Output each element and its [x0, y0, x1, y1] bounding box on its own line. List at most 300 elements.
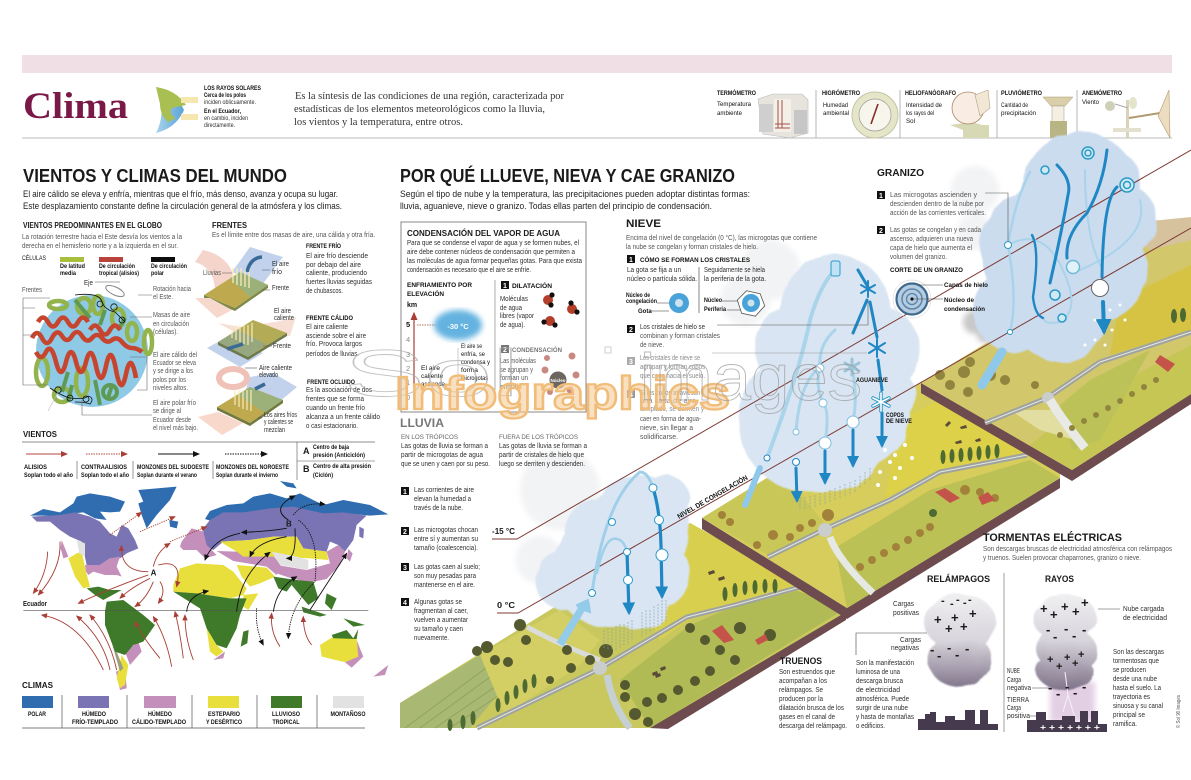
humid warm temperate [61, 528, 388, 690]
thunder text: dilatación brusca de los [779, 705, 844, 712]
snow step 4: templado, se derriten y [640, 406, 704, 413]
rain in tropics: EN LOS TRÓPICOS [401, 432, 459, 441]
charges: + [1072, 658, 1078, 670]
step 3: 3 [403, 565, 407, 572]
sun rays text [204, 86, 261, 129]
instrument: heliofanógrafo [905, 89, 990, 138]
winds legend: A [303, 446, 310, 456]
intro text: los vientos y la temperatura, entre otros. [294, 117, 463, 128]
hail step 2: capa de hielo que aumenta el [890, 245, 972, 252]
rain heading: LLUVIA [400, 416, 444, 430]
sun rays text: inciden oblicuamente. [204, 100, 256, 106]
step 4: Algunas gotas se [414, 599, 462, 606]
icon: sun rays on earth [156, 87, 198, 133]
warm front text: FRENTE CÁLIDO [306, 313, 353, 322]
lightning bolts column: Nube cargada [1123, 606, 1164, 613]
cold front labels [203, 261, 289, 292]
rain outside tropics: FUERA DE LOS TRÓPICOS [499, 432, 579, 441]
red trade winds [33, 512, 312, 670]
occluded front text: FRENTE OCLUIDO [307, 379, 355, 386]
rain in tropics [401, 432, 490, 468]
instrument: higrómetro: Humedad [823, 103, 848, 109]
lightning bolts column: de electricidad [1123, 615, 1167, 622]
watermark: Sol [344, 336, 519, 410]
warm front text: asciende sobre el aire [306, 333, 366, 340]
hail step 2: 2 [879, 228, 883, 235]
climate legend: ESTEPARIO [208, 712, 240, 718]
sun rays text: LOS RAYOS SOLARES [204, 86, 261, 92]
globe panel heading and text: derecha en el hemisferio norte y a la izquierda en el sur. [22, 243, 178, 250]
snow heading and intro: la nube se congelan y forman cristales de hielo. [626, 244, 758, 251]
charges [1040, 595, 1089, 701]
lightning bolts column: + + + + + + + [1040, 723, 1100, 732]
cell legend: polar [151, 271, 165, 277]
elevation cooling chart: asciende [421, 382, 446, 388]
storm cloud [924, 594, 996, 687]
globe labels: Masas de aire [153, 312, 190, 319]
snow step 2: 2 [629, 327, 633, 334]
cell legend: De circulación [99, 264, 135, 270]
occluded front text: o casi estacionario. [306, 423, 358, 430]
elevation cooling chart: 1 [406, 378, 410, 387]
rain in tropics: Las gotas de lluvia se forman a [401, 443, 488, 450]
central section intro: Según el tipo de nube y la temperatura, las precipitaciones pueden adoptar distintas formas: [400, 189, 750, 199]
instrument: heliofanógrafo: Sol [906, 119, 915, 125]
terrain plate 2 [702, 383, 1060, 619]
cold front text: de chubascos. [306, 288, 343, 295]
charges: - [1073, 685, 1077, 700]
charges: - [937, 648, 941, 663]
elevation cooling chart: 2 [406, 364, 410, 373]
warm front text: El aire caliente [306, 324, 348, 331]
equator label: Ecuador [23, 601, 47, 608]
icon: condensation nucleus: Núcleo [550, 378, 566, 383]
lightning bolts column: Carga [1007, 705, 1021, 712]
charges: + [1081, 595, 1089, 610]
small marker square [605, 347, 611, 353]
hail step 2: volumen del granizo. [890, 254, 947, 261]
instrument: termómetro: Temperatura [717, 102, 752, 108]
elevation cooling chart: microgotas [461, 376, 488, 382]
step 4: vuelven a aumentar [414, 617, 469, 624]
snow step 2 [627, 301, 868, 349]
globe labels: Eje [84, 280, 93, 287]
lightning bolts column: RAYOS [1045, 574, 1074, 584]
cloud 1 [535, 475, 690, 630]
watermark: Infographics [395, 367, 730, 419]
occluded front labels: elevado [259, 372, 278, 379]
electric storms intro: Son descargas bruscas de electricidad atmosférica con relámpagos [983, 546, 1172, 553]
temperature labels: -15 °C [492, 527, 515, 536]
snow step 1: crystal formation: Periferia [704, 307, 727, 313]
snow step 4 [627, 390, 704, 441]
charges: + [1047, 654, 1053, 666]
snow step 2: Los cristales de hielo se [640, 324, 705, 331]
lightning column: Cargas [900, 637, 921, 644]
snow step 1: crystal formation: 1 [629, 257, 633, 264]
thunder text: acompañan a los [779, 678, 827, 685]
winds legend: Centro de baja [313, 445, 350, 451]
globe labels: Ecuador desde [153, 417, 191, 424]
watermark: images [640, 340, 862, 414]
instrument: heliofanógrafo: HELIOFANÓGRAFO [905, 89, 956, 97]
step 4: fragmentan al caer, [414, 608, 468, 615]
sun rays text: directamente. [204, 123, 235, 129]
globe labels: polos por los [153, 377, 186, 384]
globe labels: Frentes [22, 287, 42, 294]
elevation cooling chart: caliente [421, 374, 444, 380]
snow step 3: 3 [629, 359, 633, 366]
globe labels: (células). [153, 329, 178, 336]
black monsoon winds [187, 496, 347, 645]
globe labels: el Este. [153, 294, 173, 301]
humid cold temperate [32, 507, 367, 565]
instrument: termómetro: ambiente [717, 111, 743, 117]
climate legend [22, 681, 366, 728]
cold front text: FRENTE FRÍO [306, 241, 341, 250]
cold front labels: El aire [272, 261, 289, 268]
elevation cooling chart: forma [461, 368, 479, 374]
snow step 2: de nieve. [640, 342, 664, 349]
rain outside tropics: partir de cristales de hielo que [499, 452, 584, 459]
thunder text: descarga del relámpago. [779, 723, 847, 730]
panel: water vapour condensation: las moléculas de agua formar pequeñas gotas. Para que exista [407, 258, 582, 265]
red cells [32, 318, 142, 385]
step 4: su tamaño y caen [414, 626, 463, 633]
hail step 2 [877, 226, 981, 261]
temperature labels: 0 °C [497, 601, 515, 610]
globe labels: el nivel más bajo. [153, 425, 198, 432]
snow heading and intro [626, 218, 817, 251]
globe labels: El aire cálido del [153, 352, 197, 359]
lightning bolts column [1007, 574, 1167, 732]
copyright: © Sol 90 Images [1175, 695, 1182, 728]
terrain plate 1 [400, 523, 846, 731]
winds legend: VIENTOS [23, 430, 58, 439]
hail step 1: descienden dentro de la nube por [890, 201, 985, 208]
charges: + [951, 610, 959, 625]
elevation cooling chart: km [407, 302, 417, 309]
winds legend: ALISIOS [24, 465, 47, 471]
header rule [22, 137, 1172, 139]
rain and hail hatching [604, 468, 870, 650]
thunder text: gases en el canal de [779, 714, 835, 721]
instrument: pluviómetro [1001, 89, 1073, 138]
climate legend: LLUVIOSO [272, 712, 300, 718]
step 2 [401, 527, 478, 552]
charges: - [955, 647, 959, 662]
snow and hail dots [876, 304, 1126, 487]
step: condensación: se agrupan y [500, 367, 533, 374]
polar front arcs [50, 294, 125, 404]
charges: + [969, 606, 977, 621]
axis [48, 282, 126, 411]
charges: + [945, 621, 953, 636]
hail step 2: ascenso, adquieren una nueva [890, 236, 973, 243]
instruments [717, 89, 1170, 138]
step: dilatación: de agua [500, 305, 522, 312]
instrument: anemómetro: Viento [1082, 100, 1100, 106]
lightning column: surgir de una nube [856, 705, 908, 712]
snow step 1: crystal formation: núcleo o partícula sólida. [627, 276, 697, 283]
panel: water vapour condensation [401, 222, 586, 412]
hail section: GRANIZO [877, 168, 924, 179]
panel: water vapour condensation: CONDENSACIÓN DEL VAPOR DE AGUA [407, 229, 560, 238]
lightning column: de electricidad [856, 687, 900, 694]
snow heading and intro: Encima del nivel de congelación (0 °C), las microgotas que contiene [626, 234, 817, 242]
climate legend: POLAR [28, 712, 47, 718]
lightning column: atmosférica. Puede [856, 696, 909, 703]
elevation cooling chart [406, 280, 495, 402]
globe panel heading and text: La rotación terrestre hacia el Este desvía los vientos a la [22, 234, 182, 241]
equator line [23, 610, 368, 612]
winds legend: Soplan durante el invierno [216, 473, 278, 479]
charges: - [1046, 622, 1050, 637]
step: dilatación: 1 [503, 283, 507, 290]
warm front text [306, 313, 366, 358]
divider [996, 90, 998, 138]
instrument: anemómetro [1082, 89, 1170, 138]
snow step 1: crystal formation: Núcleo [704, 298, 722, 304]
lightning bolts column: desde una nube [1113, 676, 1157, 683]
charges: - [1056, 686, 1060, 701]
step 1: través de la nube. [414, 505, 463, 512]
divider [815, 90, 817, 138]
hail cross-section [890, 267, 988, 318]
step 2: entre sí y aumentan su [414, 536, 478, 543]
elevation cooling chart: El aire [421, 366, 441, 372]
world climate map: B [286, 519, 292, 528]
temperature labels [492, 527, 515, 610]
lightning bolts column: se producen [1113, 667, 1146, 674]
globe labels: en circulación [153, 321, 189, 328]
hail cross-section: CORTE DE UN GRANIZO [890, 267, 963, 274]
step 1: 1 [403, 489, 407, 496]
lightning bolts column: Son las descargas [1113, 649, 1164, 656]
winds legend: Soplan todo el año [24, 473, 73, 479]
charges: - [965, 641, 969, 656]
climate legend: HÚMEDO [148, 711, 172, 718]
step 2: Las microgotas chocan [414, 527, 478, 534]
occluded front text [306, 379, 380, 430]
winds legend: CONTRAALISIOS [81, 465, 127, 471]
elevation cooling chart: 4 [406, 335, 410, 344]
central section heading: POR QUÉ LLUEVE, NIEVA Y CAE GRANIZO [400, 165, 735, 186]
sun rays text: en cambio, inciden [204, 116, 248, 122]
left section heading: VIENTOS Y CLIMAS DEL MUNDO [23, 166, 287, 186]
charges: - [968, 594, 972, 606]
charges: + [1040, 601, 1048, 616]
step: condensación: CONDENSACIÓN [512, 345, 562, 354]
charges: + [1056, 661, 1062, 673]
snow step 3: agrupan y forman copos [640, 364, 705, 371]
hail step 1: acción de las corrientes verticales. [890, 210, 986, 217]
level lines [492, 150, 1191, 613]
warm front text: frío. Provoca largos [306, 341, 362, 348]
charges: + [1078, 649, 1084, 661]
globe labels: y se dirige a los [153, 368, 193, 375]
step 1: elevan la humedad a [414, 496, 471, 503]
charges: - [1048, 680, 1052, 695]
snow step 4: solidificarse. [640, 434, 678, 441]
charges: - [1065, 679, 1069, 694]
cold front text [306, 241, 372, 295]
step: condensación: Las moléculas [500, 358, 536, 365]
sun rays text: Cerca de los polos [204, 93, 247, 99]
terrain plate 3 [921, 217, 1191, 481]
climate legend: CÁLIDO-TEMPLADO [132, 719, 186, 726]
watermark [344, 336, 862, 419]
cloud 3 [973, 132, 1157, 362]
lightning column [856, 574, 998, 730]
globe labels: El aire polar frío [153, 400, 196, 407]
central section intro [400, 189, 750, 211]
icon: ice crystal [831, 261, 840, 276]
lightning column: positivas [893, 610, 919, 617]
elevation cooling chart: 5 [406, 320, 410, 329]
lightning bolts column: NUBE [1007, 668, 1020, 675]
lightning bolts column: ramifica. [1113, 721, 1137, 728]
climate legend: CLIMAS [22, 681, 54, 690]
warm front labels: Frente [273, 343, 291, 350]
lightning bolts column: TIERRA [1007, 697, 1029, 704]
fronts heading: FRENTES [212, 221, 248, 230]
climate legend: HÚMEDO [82, 711, 106, 718]
polar [30, 481, 388, 528]
panel: water vapour condensation: Para que se condense el vapor de agua y se formen nubes, el [407, 240, 579, 247]
step 4 [401, 598, 469, 642]
terrain and clouds illustration [400, 132, 1191, 731]
hail cross-section: condensación [944, 307, 985, 313]
globe labels: se dirige al [153, 408, 181, 415]
lightning column: o edificios. [856, 723, 885, 730]
snow step 1: crystal formation [626, 255, 767, 318]
elevation cooling chart: condensa y [461, 360, 490, 366]
thunder text: producen por la [779, 696, 823, 703]
snow labels: AGUANIEVE [856, 378, 888, 384]
globe labels: niveles altos. [153, 385, 188, 392]
lightning bolts column: principal se [1113, 712, 1145, 719]
cold front labels: frío [272, 269, 282, 276]
step 3: son muy pesadas para [414, 573, 476, 580]
snow step 1: crystal formation: la periferia de la gota. [704, 276, 766, 283]
occluded front labels: y calientes se [264, 419, 293, 426]
cloud haze [516, 166, 999, 584]
column divider [1003, 573, 1005, 732]
discharge glow [1050, 682, 1095, 722]
charges: + [960, 619, 968, 634]
snow step 3: que caen hacia el suelo. [640, 373, 705, 380]
globe illustration [32, 282, 152, 411]
hail step 2: Las gotas se congelan y en cada [890, 227, 981, 234]
left section intro: El aire cálido se eleva y enfría, mientras que el frío, más denso, avanza y ocupa su lugar. [23, 189, 338, 199]
globe labels: Ecuador se eleva [153, 360, 196, 367]
snow labels [856, 378, 912, 425]
globe labels: Rotación hacia [153, 286, 191, 293]
cold front text: fuertes lluvias seguidas [306, 279, 372, 286]
lightning column: descarga brusca [856, 678, 903, 685]
step 1 [401, 487, 474, 512]
freezing level label: NIVEL DE CONGELACIÓN [676, 473, 749, 521]
lightning [1063, 672, 1075, 718]
instrument: anemómetro: ANEMÓMETRO [1082, 89, 1122, 97]
cold front text: caliente, produciendo [306, 270, 367, 277]
diagram: cold front [195, 247, 283, 318]
lightning bolts column: trayectoria es [1113, 694, 1150, 701]
winds legend: (Ciclón) [313, 473, 333, 479]
charges: + [1064, 652, 1070, 664]
instrument: higrómetro: HIGRÓMETRO [822, 89, 860, 97]
storm cloud [1033, 594, 1097, 690]
icon: water molecules [541, 292, 580, 328]
snow step 3: Los cristales de nieve se [640, 355, 700, 362]
rain in tropics: que se unen y caen por su peso. [401, 461, 490, 468]
lightning bolts column: sinuosa y su canal [1113, 703, 1163, 710]
step 4: 4 [403, 600, 407, 607]
fronts heading: Es el límite entre dos masas de aire, una cálida y otra fría. [212, 232, 375, 239]
elevation cooling chart: ELEVACIÓN [407, 289, 444, 298]
occluded front labels [259, 365, 297, 434]
thunder text: relámpagos. Se [779, 687, 823, 694]
step: dilatación: de agua). [500, 322, 525, 329]
lightning column: Son la manifestación [856, 660, 914, 667]
rain steps [401, 487, 480, 642]
pressure centres: A [151, 569, 157, 578]
central section intro: lluvia, aguanieve, nieve o granizo. Todas ellas parten del principio de condensación. [400, 201, 712, 211]
lightning column: Cargas [893, 601, 914, 608]
winds legend: Soplan durante el verano [137, 473, 197, 479]
cell legend: De circulación [151, 264, 187, 270]
lightning column: y hasta de montañas [856, 714, 914, 721]
intro text [294, 91, 564, 128]
step 2: 2 [403, 529, 407, 536]
snow heading and intro: NIEVE [626, 218, 661, 230]
city skyline [1027, 711, 1107, 732]
snow step 3 [627, 353, 867, 380]
lightning column: RELÁMPAGOS [927, 574, 990, 584]
charges: - [1082, 622, 1086, 637]
charges: - [1082, 679, 1086, 694]
step 1: Las corrientes de aire [414, 487, 474, 494]
elevation cooling chart: enfría, se [461, 352, 486, 358]
fronts heading [212, 221, 375, 239]
snow step 1: crystal formation: Seguidamente se hiela [704, 267, 765, 274]
charges: - [963, 597, 967, 609]
step 3: mantenerse en el aire. [414, 582, 475, 589]
thunder text [779, 656, 847, 730]
snow step 4: nieve, sin llegar a [640, 425, 693, 432]
charges: - [956, 594, 960, 606]
cell legend [22, 255, 187, 277]
world climate map [23, 481, 388, 690]
cloud 1 circulation arrows [558, 472, 668, 645]
divider [899, 90, 901, 138]
warm front labels: caliente [274, 315, 294, 322]
green cells [36, 296, 152, 402]
hail step 1: 1 [879, 193, 883, 200]
rain outside tropics: luego se derriten y descienden. [499, 461, 585, 468]
electric storms intro: y truenos. Suelen provocar chaparrones, granizo o nieve. [983, 555, 1141, 562]
climate legend: FRÍO-TEMPLADO [72, 718, 118, 726]
charges [930, 594, 977, 663]
title: Clima [23, 86, 128, 127]
panel: water vapour condensation: aire debe contener núcleos de condensación que permiten a [407, 249, 575, 256]
lightning column: negativas [891, 645, 919, 652]
snow step 1: crystal formation: La gota se fija a un [627, 267, 681, 274]
charges: + [1072, 604, 1080, 619]
smoke of hail cloud [963, 310, 993, 343]
climate legend: TROPICAL [272, 720, 300, 726]
